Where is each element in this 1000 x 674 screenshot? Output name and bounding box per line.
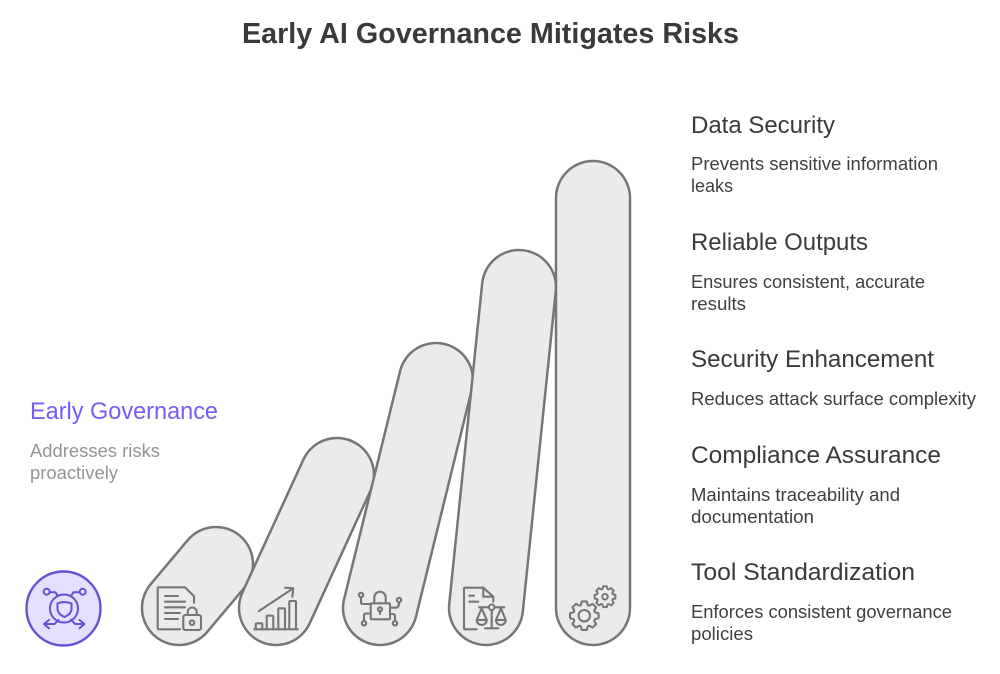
capsule 3: security enhancement xyxy=(359,380,436,626)
icon: document with lock xyxy=(158,587,201,630)
description: reliable outputs: results xyxy=(691,294,746,314)
item: tool standardization xyxy=(691,559,952,644)
item: data security xyxy=(691,112,938,196)
heading: security enhancement: Security Enhancement xyxy=(691,346,934,373)
description: compliance assurance xyxy=(691,485,900,527)
description: compliance assurance: documentation xyxy=(691,507,814,527)
capsule 2: compliance assurance xyxy=(254,475,337,629)
description: data security: leaks xyxy=(691,176,733,196)
icon: early governance shield circle xyxy=(26,572,100,646)
icon: rising bar chart xyxy=(254,588,298,629)
description: early governance: proactively xyxy=(30,463,118,483)
title: Early AI Governance Mitigates Risks xyxy=(242,18,739,50)
description: tool standardization xyxy=(691,602,952,644)
callout: early governance xyxy=(30,398,218,483)
capsule 1: tool standardization xyxy=(158,564,216,630)
description: tool standardization: policies xyxy=(691,624,753,644)
heading: early governance: Early Governance xyxy=(30,398,218,425)
description: security enhancement: Reduces attack surface complexity xyxy=(691,389,976,409)
heading: tool standardization: Tool Standardization xyxy=(691,559,915,586)
capsule 5: data security xyxy=(570,198,615,630)
heading: reliable outputs: Reliable Outputs xyxy=(691,229,868,256)
description: reliable outputs xyxy=(691,272,925,314)
description: reliable outputs: Ensures consistent, accurate xyxy=(691,272,925,292)
icon: document with scales xyxy=(464,588,506,629)
item: compliance assurance xyxy=(691,442,941,527)
description: data security: Prevents sensitive information xyxy=(691,154,938,174)
description: early governance xyxy=(30,441,160,483)
description: tool standardization: Enforces consistent governance xyxy=(691,602,952,622)
description: data security xyxy=(691,154,938,196)
capsule 4: reliable outputs xyxy=(464,287,519,629)
icon: circuit padlock xyxy=(359,592,401,626)
description: early governance: Addresses risks xyxy=(30,441,160,461)
heading: data security: Data Security xyxy=(691,112,835,139)
icon: gears xyxy=(570,586,615,630)
item: security enhancement xyxy=(691,346,976,409)
description: compliance assurance: Maintains traceability and xyxy=(691,485,900,505)
heading: compliance assurance: Compliance Assurance xyxy=(691,442,941,469)
item: reliable outputs xyxy=(691,229,925,314)
